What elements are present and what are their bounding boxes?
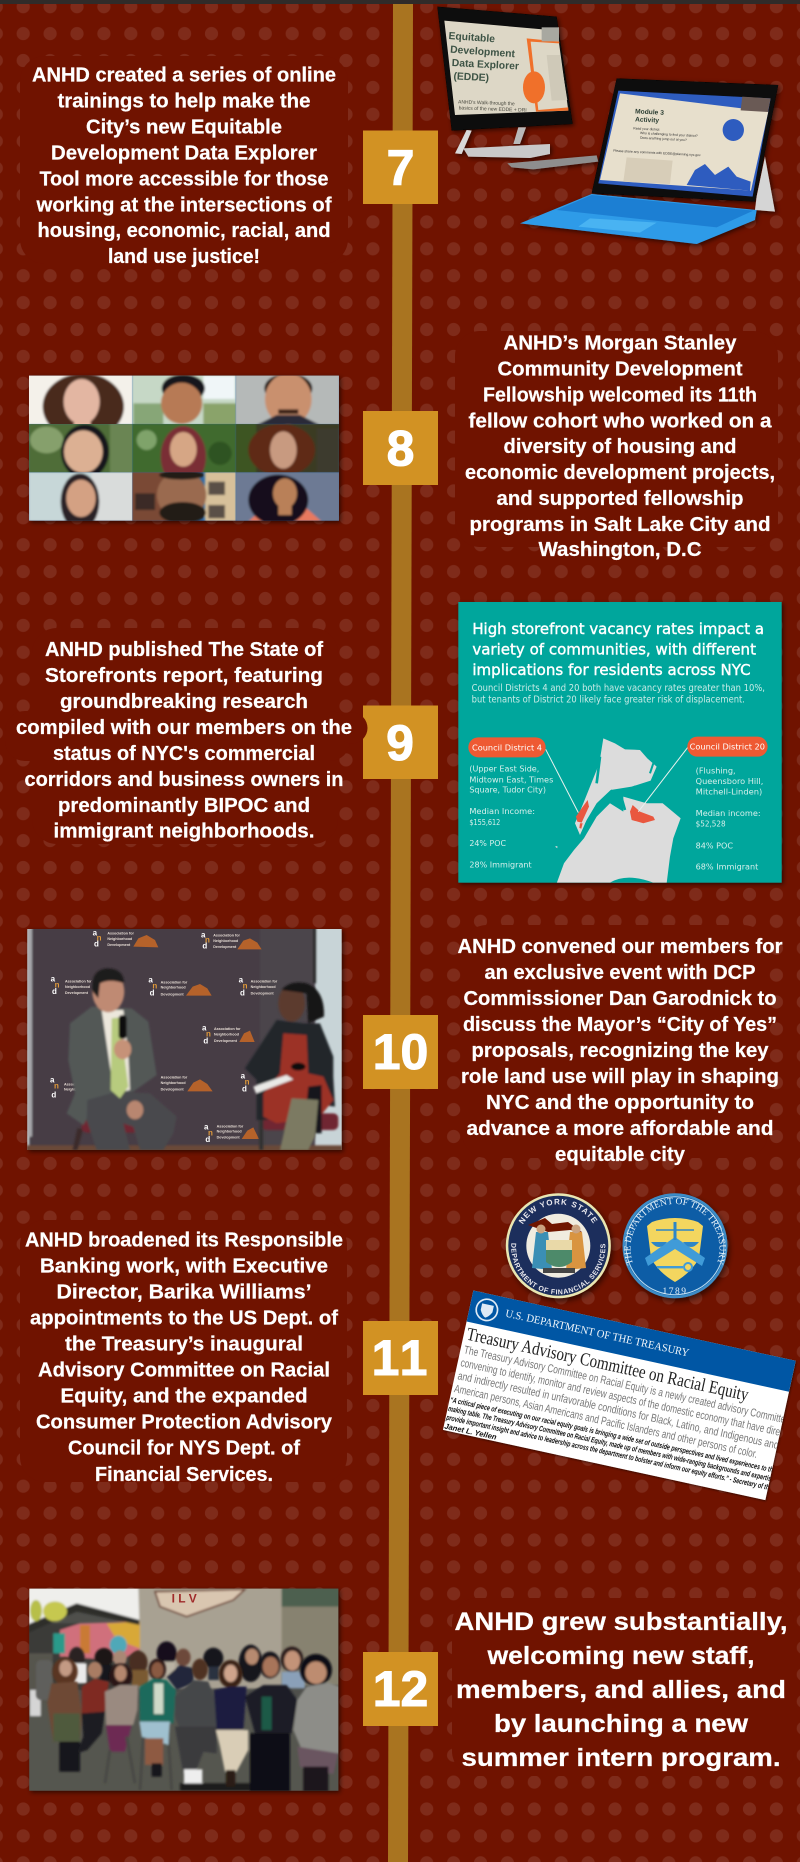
milestone 10 text: discuss the Mayor’s “City of Yes” [463,1013,777,1036]
milestone 12 text: welcoming new staff, [486,1642,754,1670]
backdrop logos: Neighborhood [213,939,238,943]
backdrop logos: n [54,1082,59,1091]
backdrop logos: a [239,976,244,985]
milestone 8 image: fellow cohort portraits [27,373,340,530]
district 4 stats: Square, Tudor City) [469,785,546,795]
panel heading [472,620,764,679]
milestone 11 text: Director, Barika Williams’ [56,1280,312,1304]
milestone 8 text: fellow cohort who worked on a [468,410,772,432]
callout: council district 20: Council District 20 [690,742,765,752]
backdrop logos: a [93,928,98,937]
callout: council district 4: Council District 4 [472,742,542,752]
icon: desktop monitor: ANHD's Walk-through the [458,99,515,107]
number badge 12: 12 [373,1661,428,1717]
milestone 11 text: Banking work, with Executive [40,1254,328,1278]
number badge 11: 11 [372,1330,430,1386]
backdrop logos: Development [107,943,131,947]
backdrop logos: a [50,1076,55,1085]
panel subtitle [472,683,765,706]
panel heading: High storefront vacancy rates impact a [472,620,764,638]
icon: laptop: Does anything jump out at you? [640,136,687,142]
woman listening [245,982,338,1150]
milestone 8 text: and supported fellowship [496,487,744,510]
milestone 8 text: programs in Salt Lake City and [470,513,770,536]
district 4 stats [469,764,553,869]
milestone 7 text: land use justice! [108,245,260,268]
panel subtitle: Council Districts 4 and 20 both have vacancy rates greater than 10%, [472,683,765,694]
milestone 8 text: Fellowship welcomed its 11th [483,384,757,406]
icon: laptop: Please share any comments with EDDE@planning.nyc.gov [613,149,701,157]
milestone 7 image: monitor and laptop [437,7,778,244]
icon: Department of the Treasury seal [622,1193,732,1304]
milestone 8 text: Community Development [498,358,743,380]
milestone 11 text: Consumer Protection Advisory [36,1410,333,1434]
web page screenshot: Treasury Advisory Committee on Racial Equity: U.S. DEPARTMENT OF THE TREASURY [504,1308,690,1359]
front row of people [47,1652,340,1793]
milestone 10 text: an exclusive event with DCP [484,961,756,984]
backdrop logos: n [97,934,102,943]
milestone 8 text [465,332,775,561]
backdrop logos: Development [65,991,89,995]
milestone 7 text: City’s new Equitable [86,116,282,138]
number badge 10 [363,1015,438,1089]
backdrop logos: n [245,1077,250,1086]
backdrop logos: n [208,1128,213,1137]
panel subtitle: but tenants of District 20 likely face greater risk of displacement. [472,695,745,706]
district 20 stats: (Flushing, [696,765,736,775]
web page screenshot: Treasury Advisory Committee on Racial Equity: Janet L. Yellen [444,1422,498,1442]
district 4 stats: 24% POC [469,838,506,848]
man speaking [67,968,177,1150]
district 4 stats: $155,612 [469,817,500,827]
milestone 11 text: the Treasury’s inaugural [65,1332,303,1356]
timeline bar [388,4,413,1862]
backdrop logos: Neighborhood [161,986,186,990]
backdrop logos: a [202,1024,207,1033]
backdrop logos: Association for [214,1027,241,1031]
backdrop logos: Neighborhood [65,985,90,989]
backdrop logos: Neighborhood [161,1081,186,1085]
backdrop logos: a [51,975,56,984]
backdrop logos: d [203,1036,208,1045]
backdrop logos: Association for [107,932,135,936]
district 20 stats [696,765,763,871]
number badge 10: 10 [373,1024,428,1080]
number badge 8: 8 [387,420,414,476]
number badge 9 [336,706,438,779]
milestone 9 text: ANHD published The State of [45,638,323,661]
icon: Department of the Treasury seal: THE DEPARTMENT OF THE TREASURY [624,1198,726,1266]
milestone 11 text: Equity, and the expanded [60,1384,308,1408]
backdrop logos: Association for [217,1124,244,1128]
milestone 9 text: corridors and business owners in [24,768,344,791]
number badge 7 [363,130,438,204]
milestone 10 text: equitable city [555,1143,686,1166]
milestone 12 text: summer intern program. [462,1744,780,1772]
panel heading: implications for residents across NYC [472,661,751,679]
milestone 12 photo: ANHD staff group [27,1587,340,1793]
icon: NY State Department of Financial Services seal [504,1193,616,1304]
backdrop logos: d [150,988,155,997]
milestone 10 text: advance a more affordable and [466,1117,774,1140]
milestone 8 text: diversity of housing and [504,435,736,458]
backdrop logos: a [204,1122,209,1131]
icon: laptop [520,78,778,244]
district 20 stats: 68% Immigrant [696,861,759,871]
milestone 11 text: Council for NYS Dept. of [68,1436,300,1460]
district 20 stats: Median income: [696,808,761,818]
backdrop logos: n [205,936,210,945]
milestone 7 text: Tool more accessible for those [40,168,328,190]
backdrop logos: Association for [161,980,188,984]
milestone 10 text: Commissioner Dan Garodnick to [464,987,776,1010]
milestone 10 text: ANHD convened our members for [458,935,783,958]
backdrop logos: Association for [161,1076,188,1080]
milestone 9 text: groundbreaking research [60,690,308,713]
district 4 stats: Median Income: [469,806,535,816]
icon: desktop monitor: Equitable [448,31,496,45]
milestone 7 text: working at the intersections of [36,194,332,216]
backdrop logos: Association for [213,934,241,938]
milestone 12 photo: ANHD staff group: I L V [172,1592,197,1606]
backdrop logos: d [240,988,245,997]
icon: desktop monitor: (EDDE) [453,71,489,84]
backdrop logos: d [242,1085,247,1094]
backdrop logos: a [148,976,153,985]
milestone 7 text: Development Data Explorer [51,142,317,164]
milestone 9 text: status of NYC's commercial [53,742,315,765]
milestone 11 text: appointments to the US Dept. of [30,1306,338,1330]
backdrop logos: n [55,980,60,989]
backdrop logos: Development [217,1136,240,1140]
backdrop logos: a [201,930,206,939]
milestone 9 text: compiled with our members on the [16,716,352,739]
back row of people [36,1641,305,1700]
icon: NY State Department of Financial Services seal: DEPARTMENT OF FINANCIAL SERVICES [511,1243,606,1294]
map of NYC districts [546,738,688,883]
backdrop logos: Development [161,1088,184,1092]
milestone 10 photo: commissioner event [25,927,343,1154]
milestone 8 text: ANHD’s Morgan Stanley [504,332,737,354]
district 20 stats: Mitchell-Linden) [696,787,762,797]
icon: NY State Department of Financial Services seal: NEW YORK STATE [518,1198,598,1224]
backdrop logos: Neighborhood [251,985,276,989]
milestone 8 text: Washington, D.C [538,538,702,561]
icon: desktop monitor [437,7,598,169]
icon: laptop: Who is challenging to find your district? [640,131,698,138]
district 20 stats: 84% POC [696,840,733,850]
backdrop logos: d [51,1090,56,1099]
backdrop logos: d [52,987,57,996]
district 20 stats: $52,528 [696,819,726,829]
backdrop logos: Development [213,945,237,949]
number badge 9: 9 [386,715,414,771]
milestone 7 text [32,64,336,268]
milestone 11 text: Advisory Committee on Racial [38,1358,330,1382]
backdrop logos: d [94,940,99,949]
milestone 10 text: proposals, recognizing the key [472,1039,769,1062]
web page screenshot: Treasury Advisory Committee on Racial Equity [443,1291,800,1502]
backdrop logos: d [202,942,207,951]
district 4 stats: Midtown East, Times [469,774,553,784]
backdrop logos: Development [214,1039,238,1043]
backdrop logos: Development [161,992,184,996]
icon: laptop: Module 3 [635,108,664,117]
milestone 9 text [16,638,352,842]
backdrop logos: Associ [64,1082,76,1086]
number badge 8 [363,411,438,485]
district 20 stats: Queensboro Hill, [696,776,763,786]
backdrop logos: Neighborhood [107,937,132,941]
milestone 7 text: ANHD created a series of online [32,64,336,86]
milestone 12 text: ANHD grew substantially, [454,1608,788,1636]
milestone 11 text: ANHD broadened its Responsible [25,1228,343,1252]
backdrop logos: Development [251,992,274,996]
milestone 10 text: NYC and the opportunity to [486,1091,754,1114]
icon: desktop monitor: Development [450,45,516,60]
icon: desktop monitor: Data Explorer [452,58,519,73]
backdrop logos: n [152,981,157,990]
milestone 10 text: role land use will play in shaping [461,1065,779,1088]
milestone 11 text [25,1228,343,1486]
milestone 9 panel: storefront vacancy map [458,602,782,883]
milestone 12 text: members, and allies, and [456,1676,786,1704]
callout: council district 4 [468,737,546,757]
district 4 stats: (Upper East Side, [469,764,539,774]
backdrop logos: n [206,1030,211,1039]
milestone 12 text: by launching a new [494,1710,749,1738]
milestone 12 text [454,1608,788,1772]
milestone 11 text: Financial Services. [95,1463,273,1486]
backdrop logos [50,928,278,1144]
icon: laptop: Read your district: [633,126,660,132]
number badge 11 [363,1321,438,1395]
callout: council district 20 [687,737,768,757]
backdrop logos: Association for [65,980,92,984]
number badge 7: 7 [387,140,414,196]
milestone 7 text: trainings to help make the [58,90,310,112]
milestone 9 text: immigrant neighborhoods. [54,820,314,842]
icon: Department of the Treasury seal: 1789 [662,1287,688,1297]
milestone 10 text [458,935,783,1166]
backdrop logos: d [205,1135,210,1144]
milestone 7 text: housing, economic, racial, and [38,219,330,242]
icon: desktop monitor: basics of the new EDDE + DRI [459,105,527,114]
milestone 9 text: predominantly BIPOC and [58,794,310,817]
panel heading: variety of communities, with different [472,640,756,658]
district 4 stats: 28% Immigrant [469,859,532,869]
backdrop logos: Neighborhood [214,1032,239,1036]
backdrop logos: Neighb [64,1088,77,1092]
milestone 8 text: economic development projects, [465,461,775,484]
backdrop logos: n [243,981,248,990]
backdrop logos: Neighborhood [217,1130,242,1134]
backdrop logos: a [241,1071,246,1080]
number badge 12 [363,1652,438,1726]
backdrop logos: Association for [251,980,278,984]
icon: laptop: Activity [635,116,660,125]
milestone 9 text: Storefronts report, featuring [45,664,323,687]
